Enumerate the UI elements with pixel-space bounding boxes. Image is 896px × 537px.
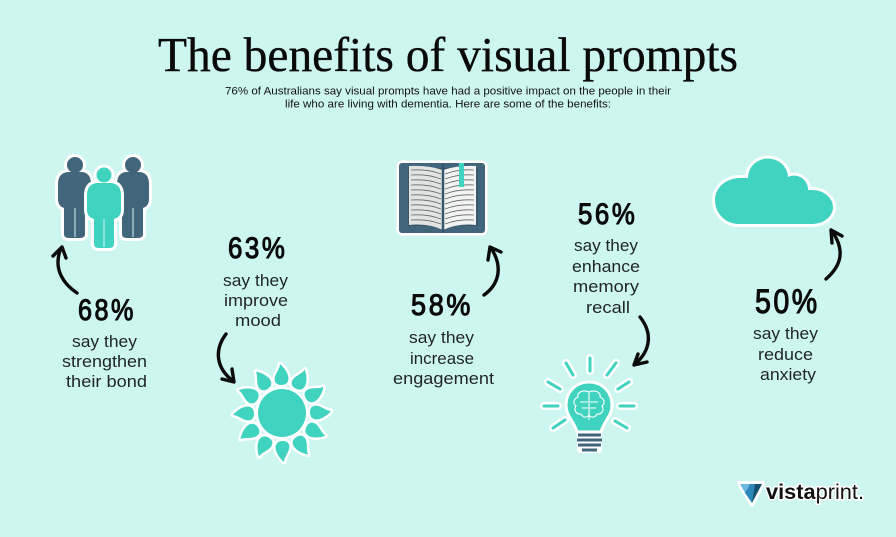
stat: 68%: 68% — [78, 293, 136, 326]
stat: 56%: 56% — [578, 197, 637, 230]
stat: 68%: say they — [72, 333, 138, 351]
stat: 56%: memory — [573, 278, 640, 296]
stat: 56%: say they — [574, 237, 639, 255]
stat: 58%: say they — [409, 329, 475, 347]
stat: 63%: improve — [224, 292, 288, 310]
stat: 58%: 58% — [411, 289, 473, 322]
icon: light bulb — [544, 358, 634, 453]
stat: 63% — [223, 231, 289, 330]
stat: 68% — [62, 293, 147, 391]
stat: 56% — [572, 197, 640, 317]
arrow: to people — [53, 247, 77, 293]
stat: 63%: mood — [235, 312, 281, 330]
icon: cloud — [715, 159, 833, 224]
stat: 50%: say they — [753, 325, 819, 343]
stat: 63%: 63% — [228, 231, 287, 264]
subtitle: 76% of Australians say visual prompts have had a positive impact on the people in their — [225, 86, 671, 98]
stat: 56%: enhance — [572, 258, 640, 276]
subtitle: life who are living with dementia. Here are some of the benefits: — [285, 98, 611, 110]
stat: 50%: 50% — [755, 283, 820, 321]
icon: three people — [58, 157, 149, 248]
stat: 63%: say they — [223, 272, 289, 290]
stat: 56%: recall — [586, 299, 630, 317]
icon: sun — [233, 364, 331, 462]
stat: 50% — [753, 283, 820, 384]
stat: 68%: strengthen — [62, 353, 147, 371]
icon: open book — [396, 160, 488, 236]
stat: 58%: increase — [410, 350, 474, 368]
arrow: to bulb — [634, 317, 648, 365]
arrow: to book — [484, 247, 501, 295]
stat: 50%: anxiety — [760, 366, 817, 384]
title: The benefits of visual prompts — [158, 29, 738, 82]
stat: 58%: engagement — [393, 370, 494, 388]
stat: 50%: reduce — [758, 346, 813, 364]
arrow: to cloud — [826, 230, 842, 279]
logo: vistaprint: vistaprint. — [766, 481, 864, 504]
subtitle — [225, 86, 671, 110]
stat: 68%: their bond — [66, 373, 147, 391]
stat: 58% — [393, 289, 494, 388]
arrow: to sun — [218, 334, 234, 382]
